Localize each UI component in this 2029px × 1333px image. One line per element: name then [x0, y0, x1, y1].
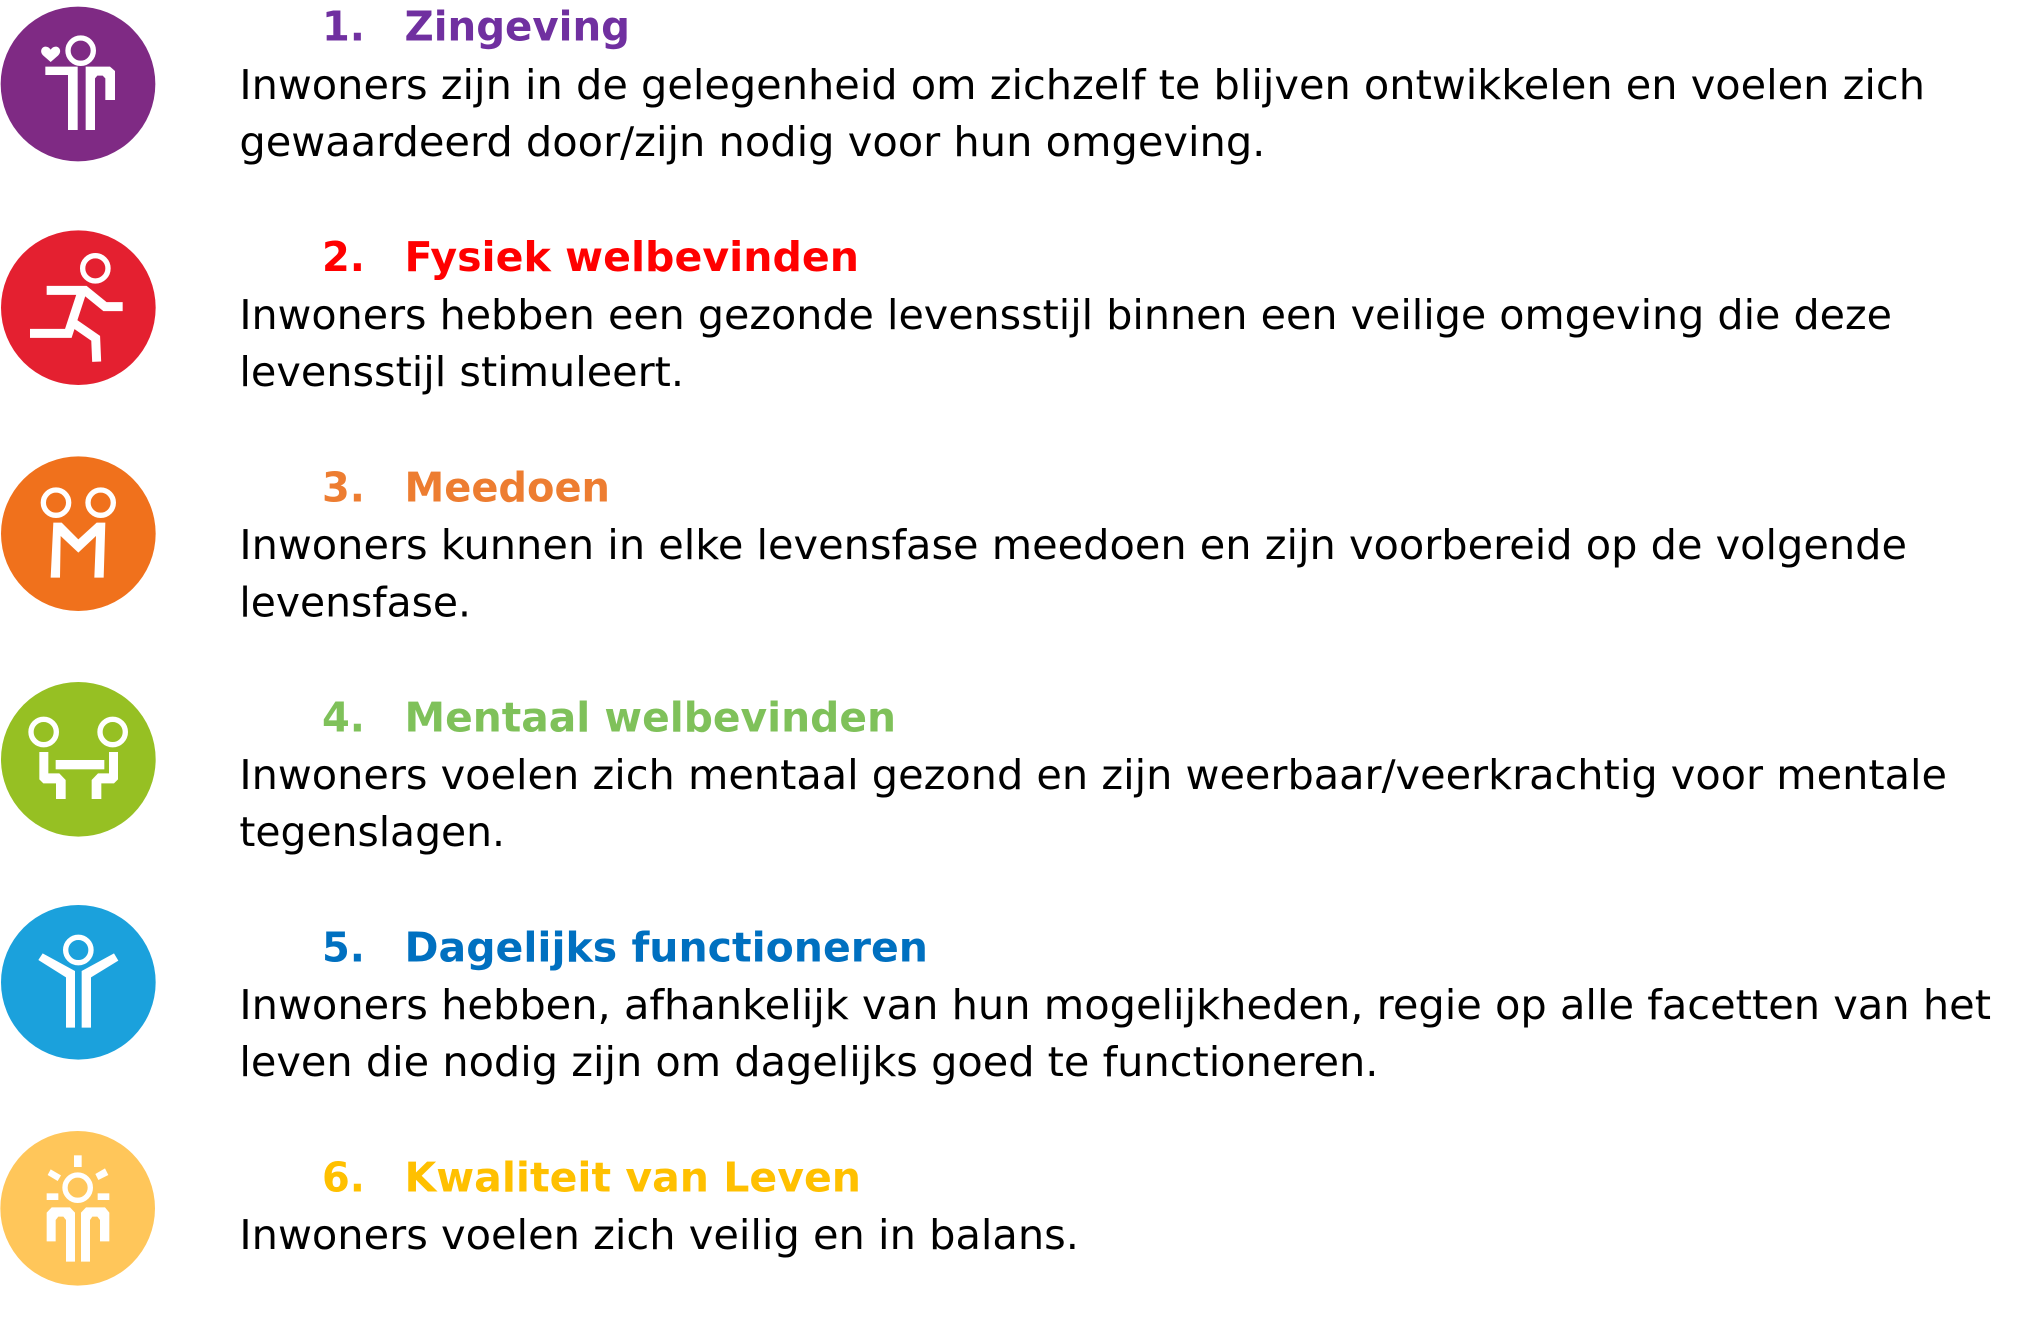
icon: sun above two people [0, 1131, 155, 1286]
heading 3: 3. [322, 464, 365, 512]
icon: running person [1, 230, 156, 385]
description 4: tegenslagen. [239, 808, 505, 856]
item 1: Zingeving [1, 2, 1925, 166]
description 5 [239, 981, 1991, 1086]
description 3: Inwoners kunnen in elke levensfase meedoen en zijn voorbereid op de volgende [239, 521, 1907, 569]
heading 2: Fysiek welbevinden [404, 233, 859, 281]
description 4: Inwoners voelen zich mentaal gezond en zijn weerbaar/veerkrachtig voor mentale [239, 751, 1947, 799]
description 2 [239, 291, 1892, 396]
description 2: levensstijl stimuleert. [239, 348, 684, 396]
heading 6: Kwaliteit van Leven [404, 1154, 861, 1202]
icon: two people at a table [1, 682, 156, 837]
item 6: Kwaliteit van Leven [0, 1131, 1079, 1286]
heading 1: Zingeving [404, 2, 630, 50]
heading 3: Meedoen [404, 464, 610, 512]
heading 6: 6. [322, 1154, 365, 1202]
description 1: gewaardeerd door/zijn nodig voor hun omgeving. [239, 118, 1265, 166]
description 1 [239, 61, 1925, 166]
heading 5: Dagelijks functioneren [404, 924, 928, 972]
description 6: Inwoners voelen zich veilig en in balans. [239, 1211, 1079, 1259]
item 3: Meedoen [1, 456, 1907, 626]
item 5: Dagelijks functioneren [1, 905, 1991, 1086]
icon: two heads with letter M [1, 456, 156, 611]
heading 5: 5. [322, 924, 365, 972]
description 2: Inwoners hebben een gezonde levensstijl binnen een veilige omgeving die deze [239, 291, 1892, 339]
description 3: levensfase. [239, 578, 471, 626]
item 4: Mentaal welbevinden [1, 682, 1947, 856]
icon: person with raised arms [1, 905, 156, 1060]
description 1: Inwoners zijn in de gelegenheid om zichzelf te blijven ontwikkelen en voelen zich [239, 61, 1925, 109]
heading 4: 4. [322, 694, 365, 742]
heading 4: Mentaal welbevinden [404, 694, 896, 742]
icon: person with heart [1, 7, 155, 161]
description 5: Inwoners hebben, afhankelijk van hun mogelijkheden, regie op alle facetten van het [239, 981, 1991, 1029]
heading 1: 1. [322, 2, 365, 50]
description 3 [239, 521, 1907, 626]
description 5: leven die nodig zijn om dagelijks goed te functioneren. [239, 1038, 1378, 1086]
description 4 [239, 751, 1947, 856]
item 2: Fysiek welbevinden [1, 230, 1892, 396]
heading 2: 2. [322, 233, 365, 281]
